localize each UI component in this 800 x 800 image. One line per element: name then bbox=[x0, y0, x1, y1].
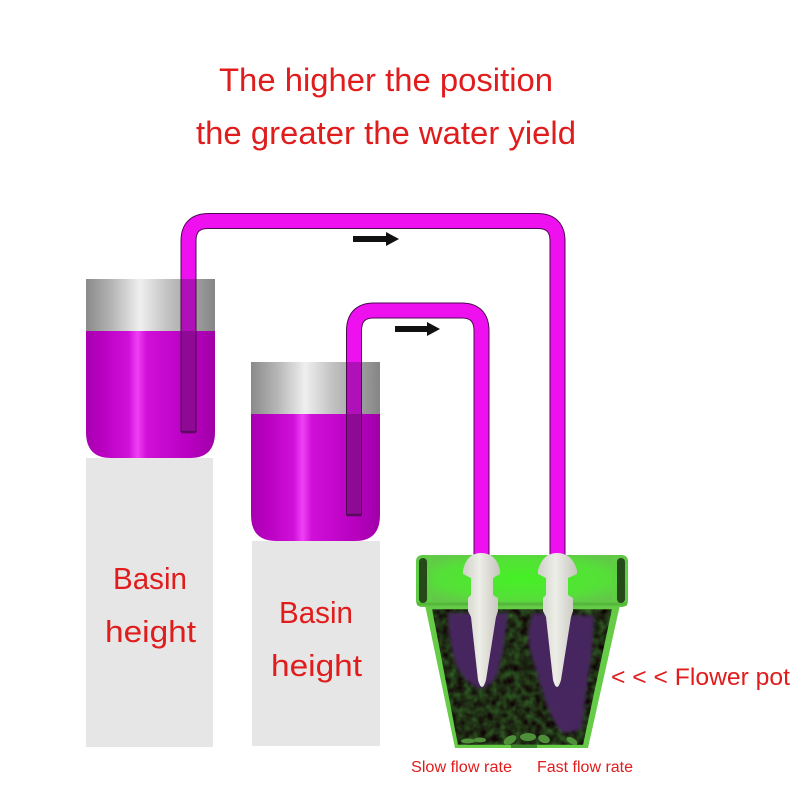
title bbox=[196, 62, 576, 151]
basin: short bbox=[251, 362, 380, 541]
pillar: right basin height: Basin bbox=[279, 595, 353, 630]
pillar: left basin height: Basin bbox=[113, 561, 187, 596]
water stain: slow bbox=[448, 613, 508, 688]
pipe: short bbox=[346, 310, 482, 556]
title: the greater the water yield bbox=[196, 115, 576, 151]
pot body bbox=[425, 605, 620, 748]
flower pot bbox=[416, 555, 628, 748]
arrow: long pipe flow bbox=[353, 232, 399, 246]
label: fast flow rate: Fast flow rate bbox=[537, 759, 633, 776]
pot rim bbox=[416, 555, 628, 607]
leaves bbox=[461, 733, 579, 747]
pillar: right basin height: height bbox=[271, 648, 362, 683]
soil bbox=[432, 609, 612, 745]
water stain: fast bbox=[529, 613, 594, 732]
basin: tall bbox=[86, 279, 215, 458]
title: The higher the position bbox=[219, 62, 553, 98]
arrow: short pipe flow bbox=[395, 322, 440, 336]
pipe: long bbox=[181, 221, 558, 556]
label: flower pot: < < < Flower pot bbox=[611, 664, 790, 691]
spike: slow bbox=[463, 553, 500, 687]
pillar: left basin height bbox=[86, 458, 213, 747]
pillar: right basin height bbox=[252, 541, 380, 746]
spike: fast bbox=[538, 553, 577, 687]
rim slots bbox=[419, 558, 427, 603]
label: slow flow rate: Slow flow rate bbox=[411, 759, 512, 776]
pillar: left basin height: height bbox=[105, 614, 196, 649]
